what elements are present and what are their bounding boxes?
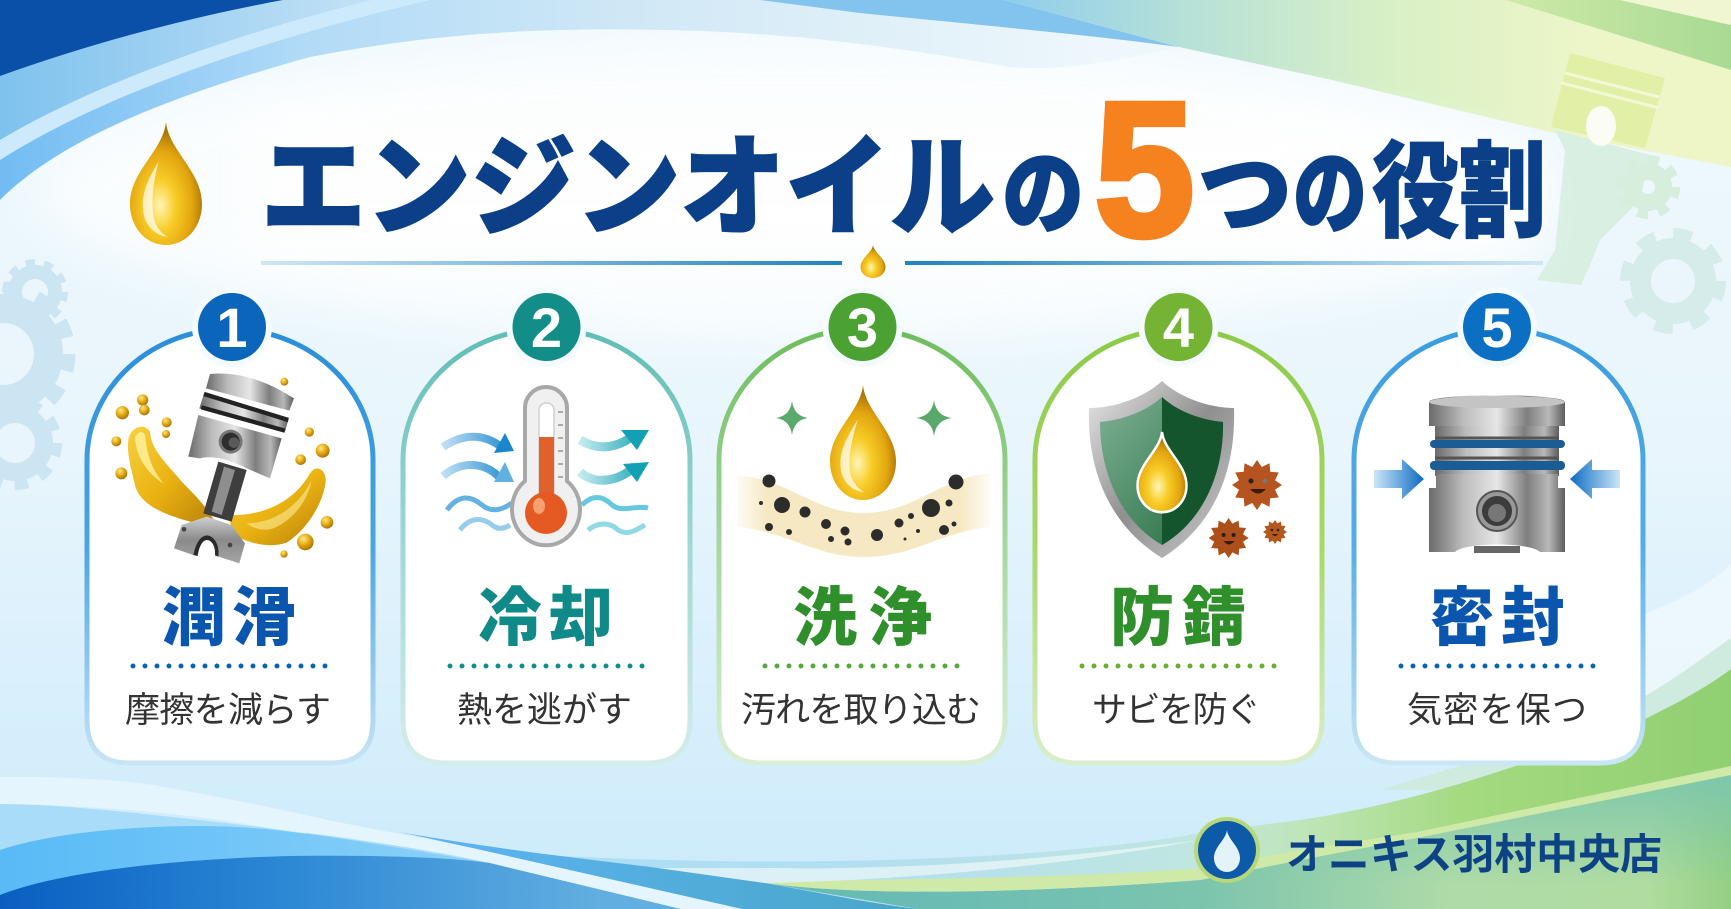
- panel: 1 lubrication: [87, 287, 373, 763]
- number badge 3: 3: [847, 296, 878, 359]
- number badge 5: 5: [1481, 296, 1513, 359]
- gear: left large: [0, 288, 69, 420]
- description: 熱を逃がす: [457, 691, 632, 730]
- description: サビを防ぐ: [1092, 691, 1261, 730]
- logo: blue circle with drop: [1194, 817, 1260, 883]
- divider with small drop: [261, 245, 1543, 278]
- icon: thermometer with arrows: [443, 387, 649, 545]
- description: 汚れを取り込む: [741, 691, 981, 730]
- top-left pale wave band: [0, 0, 1179, 200]
- dotted rule: [765, 664, 958, 668]
- bottom blue wedge: [400, 832, 918, 909]
- title: 役割: [1372, 135, 1546, 251]
- top blue ribbon: [760, 0, 1179, 47]
- description: 気密を保つ: [1407, 691, 1587, 730]
- number badge 1: [192, 287, 272, 367]
- number badge 4: [1138, 287, 1218, 367]
- rust germ medium: [1209, 518, 1249, 558]
- top-left light stripe: [0, 0, 430, 160]
- bottom-left mid blue layer: [0, 826, 681, 909]
- faint piston decoration: head: [1551, 53, 1665, 148]
- shop name text: オニキス羽村中央店: [1286, 831, 1662, 878]
- title: の: [1002, 144, 1084, 246]
- dotted rule: [1401, 664, 1594, 668]
- top-left mid blue wave: [0, 0, 372, 140]
- top-left dark blue wave: [0, 0, 283, 76]
- icon: piston with oil splash: [111, 374, 333, 563]
- bottom teal wave: [765, 775, 1731, 909]
- bottom pale band: [306, 815, 1300, 909]
- icon: shield with drop: [1089, 381, 1287, 558]
- bottom white stripe: [0, 777, 742, 909]
- sparkles: [776, 400, 952, 436]
- heading: 密封: [1430, 582, 1565, 654]
- faint piston decoration: rod: [1537, 130, 1650, 285]
- oil drop: [830, 385, 896, 500]
- right arrow: [1570, 459, 1620, 499]
- heading: 潤滑: [162, 582, 296, 654]
- bottom white streak: [658, 840, 1200, 883]
- footer shop name: [1194, 817, 1662, 883]
- rust germ large: [1232, 460, 1282, 510]
- top-right green wave: [1004, 0, 1731, 167]
- heading: 洗浄: [793, 582, 932, 654]
- gear: left upper small: [5, 262, 65, 322]
- gear: left lower: [0, 400, 58, 486]
- panel: 2 cooling: [403, 287, 690, 763]
- number badge 1: 1: [216, 296, 248, 359]
- left arrow: [1374, 459, 1424, 499]
- bottom-left pale layer: [0, 804, 681, 909]
- top-right dark green band: [1506, 0, 1731, 70]
- top-right pale corner: [1620, 0, 1731, 25]
- icon: piston with rings and arrows: [1374, 395, 1620, 553]
- rust germ small: [1263, 520, 1287, 544]
- dotted rule: [133, 664, 326, 668]
- title: つ: [1198, 144, 1292, 246]
- bottom cream stripe: [765, 766, 1731, 892]
- panel: 4 rust prevention: [1035, 287, 1322, 763]
- title: 5: [1095, 64, 1194, 276]
- number badge 2: [506, 287, 586, 367]
- description: 摩擦を減らす: [125, 691, 331, 730]
- gear: right small: [1620, 159, 1676, 215]
- number badge 3: [822, 287, 902, 367]
- bottom-right white band: [1500, 564, 1731, 770]
- icon: oil drop: [130, 122, 202, 245]
- number badge 2: 2: [531, 296, 562, 359]
- icon: small oil drop: [860, 245, 886, 278]
- number badge 4: 4: [1163, 296, 1194, 359]
- dotted rule: [1082, 664, 1275, 668]
- gear: right large: [1625, 233, 1721, 329]
- heading: 冷却: [478, 582, 613, 654]
- bottom teal shading: [1000, 775, 1731, 909]
- bottom-right pale green band: [1380, 638, 1731, 790]
- bottom-right green wave: [1200, 669, 1731, 909]
- heading: 防錆: [1110, 582, 1246, 654]
- panel: 5 sealing: [1354, 287, 1643, 763]
- number badge 5: [1457, 287, 1537, 367]
- bottom-left dark blue layer: [0, 856, 681, 909]
- panel: 3 cleaning: [719, 287, 1005, 763]
- title text: エンジンオイル: [261, 127, 995, 250]
- icon: oil band with dirt and drop: [737, 385, 990, 557]
- title: の: [1293, 144, 1367, 246]
- title: [130, 64, 1546, 276]
- dotted rule: [450, 664, 643, 668]
